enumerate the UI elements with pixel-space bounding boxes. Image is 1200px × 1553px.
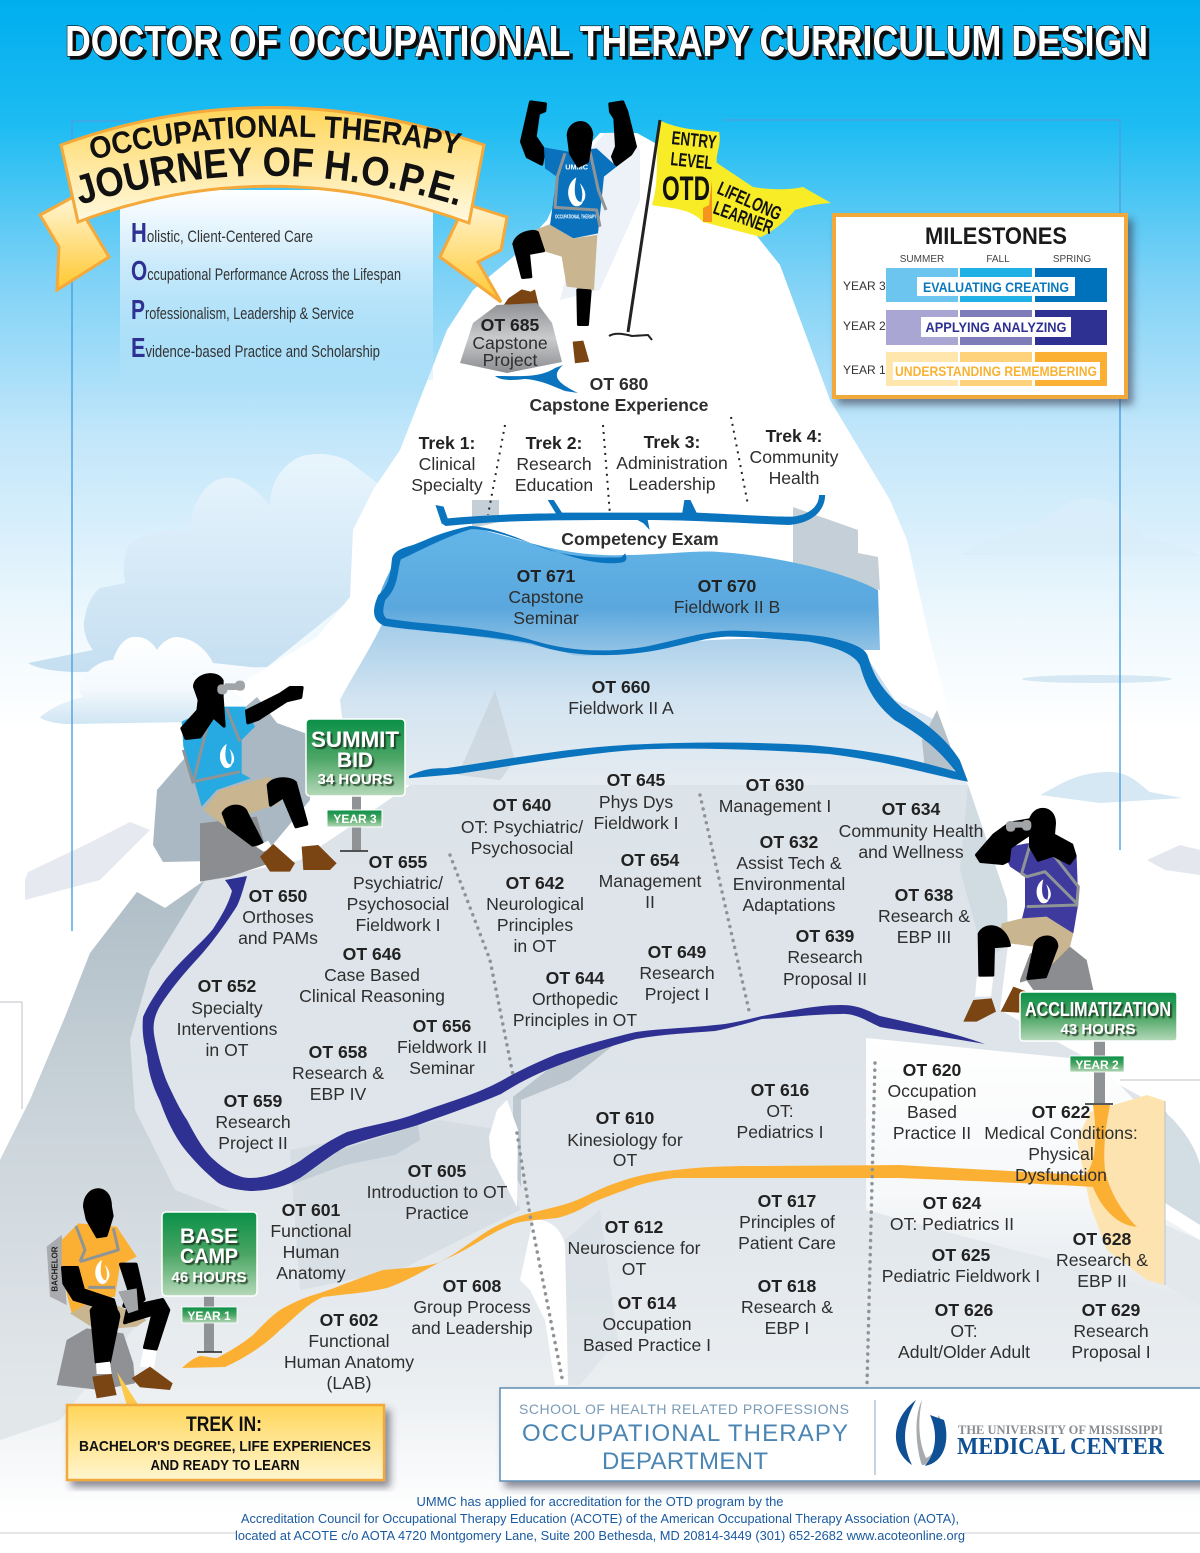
footer rule <box>0 1532 1200 1534</box>
far snowy mountains <box>25 822 1200 900</box>
competency exam: Competency Exam <box>561 529 719 549</box>
flag: LEVEL <box>669 149 714 174</box>
course: OT 650: OT 650 <box>249 886 308 906</box>
course: OT 670: OT 670 <box>698 576 757 596</box>
course: OT 638: EBP III <box>897 927 951 947</box>
course: OT 608: and Leadership <box>411 1318 533 1338</box>
trek 2: Trek 2: <box>526 433 582 453</box>
course: OT 639: Proposal II <box>783 969 867 989</box>
course: OT 649: Research <box>639 963 715 983</box>
sign: base camp: CAMP <box>180 1245 238 1268</box>
season labels <box>900 254 1091 265</box>
shirt lettering: UMMC <box>565 162 589 171</box>
head and arm <box>182 675 224 738</box>
left arm <box>522 102 545 164</box>
white crevasses <box>489 1100 1200 1385</box>
course: OT 645: OT 645 <box>607 770 666 790</box>
accreditation note: UMMC has applied for accreditation for the OTD program by the <box>416 1495 784 1509</box>
course: OT 629: Research <box>1073 1321 1149 1341</box>
course: OT 652: OT 652 <box>198 976 257 996</box>
course: OT 671: Capstone <box>508 587 584 607</box>
hope: evidence: Evidence-based Practice and Scholarship <box>131 332 380 363</box>
boots <box>963 987 1027 1022</box>
course: OT 620: Occupation <box>888 1081 976 1101</box>
callout: trek in: TREK IN: <box>186 1413 262 1436</box>
course: OT 616: OT: <box>766 1101 794 1121</box>
course: OT 670: Fieldwork II B <box>674 597 780 617</box>
legs <box>91 1300 169 1362</box>
banner: journey of hope: OCCUPATIONAL THERAPY <box>90 115 462 158</box>
bent leg <box>514 232 543 277</box>
course: OT 614: OT 614 <box>618 1293 677 1313</box>
course: OT 620: Based <box>907 1102 957 1122</box>
course: OT 624: OT 624 <box>923 1193 982 1213</box>
callout: trek in <box>67 1372 384 1480</box>
course: OT 632: OT 632 <box>760 832 819 852</box>
course: OT 655: Psychiatric/ <box>353 873 443 893</box>
head and arms <box>977 810 1075 863</box>
course: OT 618: Research & <box>741 1297 833 1317</box>
year 2 row: APPLYING ANALYZING <box>926 319 1067 335</box>
snow cap <box>230 133 968 785</box>
accreditation note <box>235 1495 965 1543</box>
trek 3: Administration <box>616 453 728 473</box>
course: OT 645: Phys Dys <box>599 792 673 812</box>
figure: base camp hiker <box>47 1190 173 1398</box>
course: OT 658: EBP IV <box>310 1084 366 1104</box>
trek 4: Community <box>750 447 839 467</box>
course: OT 617: Patient Care <box>738 1233 836 1253</box>
season labels: FALL <box>986 254 1010 265</box>
course: OT 617: Principles of <box>739 1212 835 1232</box>
blue water band <box>376 527 880 656</box>
shorts <box>203 777 280 830</box>
course: OT 618: EBP I <box>765 1318 809 1338</box>
rock <box>200 817 270 882</box>
trail: navy year 2 <box>143 876 985 1191</box>
chest logo <box>568 177 585 206</box>
course: OT 640: Psychosocial <box>471 838 573 858</box>
course: OT 650: and PAMs <box>238 928 318 948</box>
course: OT 654: OT 654 <box>621 850 680 870</box>
shorts <box>70 1300 147 1330</box>
course: OT 642: OT 642 <box>506 873 565 893</box>
milestones box <box>834 215 1126 397</box>
course: OT 622: Physical <box>1028 1144 1094 1164</box>
course: OT 654: II <box>645 892 655 912</box>
course: OT 622: Medical Conditions: <box>984 1123 1138 1143</box>
hope: holistic: Holistic, Client-Centered Care <box>131 217 313 248</box>
course: OT 605: OT 605 <box>408 1161 467 1181</box>
main mountain body <box>0 785 1200 1553</box>
course: OT 632: Assist Tech & <box>736 853 842 873</box>
course: OT 659: OT 659 <box>224 1091 283 1111</box>
boots <box>503 289 539 308</box>
course: OT 634: and Wellness <box>858 842 964 862</box>
course: OT 608: OT 608 <box>443 1276 502 1296</box>
course: OT 680: OT 680 <box>590 374 649 394</box>
shirt <box>544 147 617 238</box>
year 1 row <box>843 352 1107 386</box>
course: OT 645: Fieldwork I <box>593 813 679 833</box>
binoculars <box>1006 820 1031 832</box>
background clouds <box>28 454 1200 803</box>
course: OT 640: OT 640 <box>493 795 552 815</box>
shirt lettering: OCCUPATIONAL THERAPY <box>555 215 596 221</box>
course: OT 644: Principles in OT <box>513 1010 637 1030</box>
course: OT 639: OT 639 <box>796 926 855 946</box>
sign: base camp: 46 HOURS <box>171 1269 247 1286</box>
course: OT 616: OT 616 <box>751 1080 810 1100</box>
rock: OT 685 <box>460 303 562 373</box>
head <box>568 123 592 166</box>
callout: trek in: BACHELOR'S DEGREE, LIFE EXPERIENCES <box>79 1438 371 1455</box>
rock <box>1020 947 1093 990</box>
figure: acclimatization hiker <box>963 810 1093 1022</box>
trek 3: Trek 3: <box>644 432 700 452</box>
figure: summit bid hiker <box>182 675 337 882</box>
shirt lettering <box>555 162 596 221</box>
course: OT 614: Based Practice I <box>583 1335 711 1355</box>
legs <box>223 779 307 845</box>
logo <box>220 744 234 768</box>
backpack: BACHELOR <box>50 1246 59 1292</box>
course: OT 628: OT 628 <box>1073 1229 1132 1249</box>
pale snow behind summit climber <box>560 132 640 300</box>
department name line 2: DEPARTMENT <box>602 1448 768 1475</box>
course: OT 649: OT 649 <box>648 942 707 962</box>
course: OT 642: in OT <box>513 936 557 956</box>
backpack <box>47 1235 67 1305</box>
course: OT 685: Capstone <box>472 333 548 353</box>
course: OT 659: Project II <box>218 1133 288 1153</box>
boots <box>92 1367 173 1398</box>
hope: professionalism: Professionalism, Leadership & Service <box>131 294 354 325</box>
course: OT 625: Pediatric Fieldwork I <box>882 1266 1040 1286</box>
left slope shading <box>0 880 240 1440</box>
course: OT 655: OT 655 <box>369 852 428 872</box>
course: OT 644: OT 644 <box>546 968 605 988</box>
banner: journey of hope <box>38 106 509 304</box>
course: OT 646: Clinical Reasoning <box>299 986 445 1006</box>
course: OT 602: (LAB) <box>327 1373 371 1393</box>
trail: top blue ridge <box>435 495 825 530</box>
accreditation note: Accreditation Council for Occupational Therapy Education (ACOTE) of the American Occupational Therapy Association (AOTA), <box>241 1512 959 1526</box>
season labels: SUMMER <box>900 254 944 265</box>
sign: acclimatization: YEAR 2 <box>1075 1058 1119 1072</box>
trail: OT 680 splash <box>495 365 578 393</box>
course: OT 646: Case Based <box>324 965 420 985</box>
mountain blue fade below river <box>340 620 968 785</box>
sign: summit bid: YEAR 3 <box>333 812 377 826</box>
course: OT 626: OT 626 <box>935 1300 994 1320</box>
flag pole <box>609 120 660 340</box>
course: OT 601: Functional <box>270 1221 352 1241</box>
sign: summit bid: BID <box>337 749 373 772</box>
course: OT 629: Proposal I <box>1071 1342 1151 1362</box>
standing leg <box>578 290 590 324</box>
sign: summit bid: SUMMIT <box>311 727 400 752</box>
year 3 row <box>843 268 1107 302</box>
course: OT 659: Research <box>215 1112 291 1132</box>
arms <box>63 1264 144 1309</box>
shorts <box>535 224 597 290</box>
course: OT 632: Adaptations <box>743 895 836 915</box>
course: OT 612: OT 612 <box>605 1217 664 1237</box>
dotted trek dividers <box>450 417 875 1385</box>
department name: OCCUPATIONAL THERAPY <box>522 1420 848 1447</box>
shirt <box>1002 842 1078 933</box>
course: OT 605: Introduction to OT <box>367 1182 508 1202</box>
course: OT 652: Interventions <box>177 1019 278 1039</box>
course: OT 655: Psychosocial <box>347 894 449 914</box>
course: OT 644: Orthopedic <box>532 989 618 1009</box>
year 1 row: UNDERSTANDING REMEMBERING <box>895 363 1097 379</box>
trail: yellow faded continuation <box>1077 1095 1165 1285</box>
course: OT 685: OT 685 <box>481 315 540 335</box>
course: OT 640: OT: Psychiatric/ <box>461 817 583 837</box>
school name: SCHOOL OF HEALTH RELATED PROFESSIONS <box>519 1401 849 1417</box>
course: OT 652: in OT <box>205 1040 249 1060</box>
course: OT 656: Seminar <box>409 1058 475 1078</box>
course: OT 610: OT <box>613 1150 637 1170</box>
course: OT 605: Practice <box>405 1203 469 1223</box>
course: OT 671: OT 671 <box>517 566 576 586</box>
sign: base camp <box>162 1212 257 1352</box>
course: OT 610: OT 610 <box>596 1108 655 1128</box>
course: OT 618: OT 618 <box>758 1276 817 1296</box>
course: OT 612: OT <box>622 1259 646 1279</box>
thin contour lines <box>0 1002 1200 1285</box>
logo <box>1037 879 1051 903</box>
course: OT 624: OT: Pediatrics II <box>890 1214 1014 1234</box>
sign: summit bid <box>306 719 405 851</box>
trek 1: Trek 1: <box>419 433 475 453</box>
legs <box>979 927 1057 978</box>
mountain rock facets <box>153 500 1200 1385</box>
trek 4: Health <box>769 468 819 488</box>
shorts <box>997 917 1073 967</box>
department and university logo box <box>500 1388 1200 1481</box>
pointing arm <box>247 688 302 723</box>
flag: OTD <box>662 170 710 208</box>
year 2 row <box>843 310 1107 345</box>
course: OT 616: Pediatrics I <box>736 1122 824 1142</box>
trek 2: Education <box>515 475 593 495</box>
course: OT 639: Research <box>787 947 863 967</box>
course: OT 614: Occupation <box>602 1314 692 1334</box>
year 3 row: EVALUATING CREATING <box>923 279 1069 295</box>
course: OT 617: OT 617 <box>758 1191 817 1211</box>
course: OT 650: Orthoses <box>242 907 314 927</box>
shirt <box>62 1223 137 1313</box>
course: OT 601: OT 601 <box>282 1200 341 1220</box>
flag: ENTRY <box>670 128 718 154</box>
course: OT 660: OT 660 <box>592 677 651 697</box>
course: OT 656: OT 656 <box>413 1016 472 1036</box>
figure: summit climber <box>503 102 635 363</box>
milestones heading: MILESTONES <box>925 223 1067 250</box>
trail: capstone blue river <box>374 526 968 782</box>
shirt <box>182 707 255 807</box>
course: OT 638: OT 638 <box>895 885 954 905</box>
sign: base camp: BASE <box>180 1225 238 1248</box>
trek 2: Research <box>516 454 592 474</box>
straps <box>1022 845 1078 907</box>
straps <box>76 1226 118 1287</box>
sign: base camp: YEAR 1 <box>187 1309 231 1323</box>
course: OT 655: Fieldwork I <box>355 915 441 935</box>
course: OT 626: OT: <box>950 1321 978 1341</box>
year 1 row: YEAR 1 <box>843 363 886 377</box>
university name: THE UNIVERSITY OF MISSISSIPPI <box>958 1422 1163 1437</box>
trek 1: Specialty <box>411 475 483 495</box>
head <box>85 1190 112 1237</box>
course: OT 658: Research & <box>292 1063 384 1083</box>
binoculars <box>217 681 245 694</box>
course: OT 685: Project <box>483 350 537 370</box>
rock <box>57 1328 135 1390</box>
season labels: SPRING <box>1053 254 1091 265</box>
course: OT 642: Neurological <box>486 894 584 914</box>
frame lines <box>72 120 1120 931</box>
binoculars <box>118 1288 138 1313</box>
course: OT 646: OT 646 <box>343 944 402 964</box>
trail: yellow year 1 <box>182 1105 1137 1368</box>
accreditation note: located at ACOTE c/o AOTA 4720 Montgomery Lane, Suite 200 Bethesda, MD 20814-3449 (301) 652-2682 www.acoteonline.org <box>235 1529 965 1543</box>
flag: LEARNER <box>710 198 776 239</box>
course: OT 622: Dysfunction <box>1015 1165 1107 1185</box>
course: OT 620: OT 620 <box>903 1060 962 1080</box>
course: OT 649: Project I <box>645 984 709 1004</box>
backpack straps <box>555 152 606 227</box>
sign: acclimatization <box>1020 992 1177 1104</box>
course: OT 642: Principles <box>497 915 573 935</box>
trek 1: Clinical <box>419 454 475 474</box>
course: OT 602: OT 602 <box>320 1310 379 1330</box>
course: OT 601: Anatomy <box>276 1263 346 1283</box>
course: OT 654: Management <box>599 871 701 891</box>
course: OT 658: OT 658 <box>309 1042 368 1062</box>
course: OT 656: Fieldwork II <box>397 1037 487 1057</box>
course: OT 602: Human Anatomy <box>284 1352 414 1372</box>
sign: acclimatization: 43 HOURS <box>1060 1021 1136 1038</box>
boots <box>260 844 337 872</box>
course: OT 638: Research & <box>878 906 970 926</box>
hope: occupational: Occupational Performance Across the Lifespan <box>131 255 401 286</box>
course: OT 630: Management I <box>719 796 831 816</box>
course: OT 680: Capstone Experience <box>530 395 709 415</box>
straps <box>183 708 240 783</box>
icon: UMMC logo <box>896 1400 946 1466</box>
course: OT 620: Practice II <box>893 1123 971 1143</box>
course: OT 601: Human <box>283 1242 339 1262</box>
logo <box>95 1260 109 1284</box>
course: OT 630: OT 630 <box>746 775 805 795</box>
socks <box>96 1349 157 1374</box>
callout: trek in: AND READY TO LEARN <box>150 1457 300 1474</box>
course: OT 622: OT 622 <box>1032 1102 1091 1122</box>
course: OT 634: Community Health <box>839 821 983 841</box>
course: OT 626: Adult/Older Adult <box>898 1342 1030 1362</box>
course: OT 628: Research & <box>1056 1250 1148 1270</box>
course: OT 602: Functional <box>308 1331 390 1351</box>
course: OT 612: Neuroscience for <box>568 1238 701 1258</box>
trek 3: Leadership <box>628 474 716 494</box>
course: OT 634: OT 634 <box>882 799 941 819</box>
medical center: MEDICAL CENTER <box>957 1434 1165 1460</box>
course: OT 628: EBP II <box>1077 1271 1127 1291</box>
right white bench <box>866 1038 1200 1300</box>
year 3 row: YEAR 3 <box>843 279 886 293</box>
course: OT 660: Fieldwork II A <box>568 698 674 718</box>
sign: summit bid: 34 HOURS <box>317 771 393 788</box>
right arm <box>610 102 635 165</box>
flag: LIFELONG <box>714 178 785 225</box>
course: OT 632: Environmental <box>733 874 845 894</box>
HOPE text panel <box>120 190 433 380</box>
course: OT 610: Kinesiology for <box>567 1130 683 1150</box>
trek 4: Trek 4: <box>766 426 822 446</box>
course: OT 652: Specialty <box>191 998 263 1018</box>
socks <box>256 827 313 852</box>
course: OT 629: OT 629 <box>1082 1300 1141 1320</box>
course: OT 625: OT 625 <box>932 1245 991 1265</box>
banner: journey of hope: JOURNEY OF H.O.P.E. <box>78 147 458 206</box>
course: OT 608: Group Process <box>413 1297 531 1317</box>
socks <box>975 977 1033 997</box>
flag <box>652 120 831 239</box>
course: OT 671: Seminar <box>513 608 579 628</box>
year 2 row: YEAR 2 <box>843 319 886 333</box>
